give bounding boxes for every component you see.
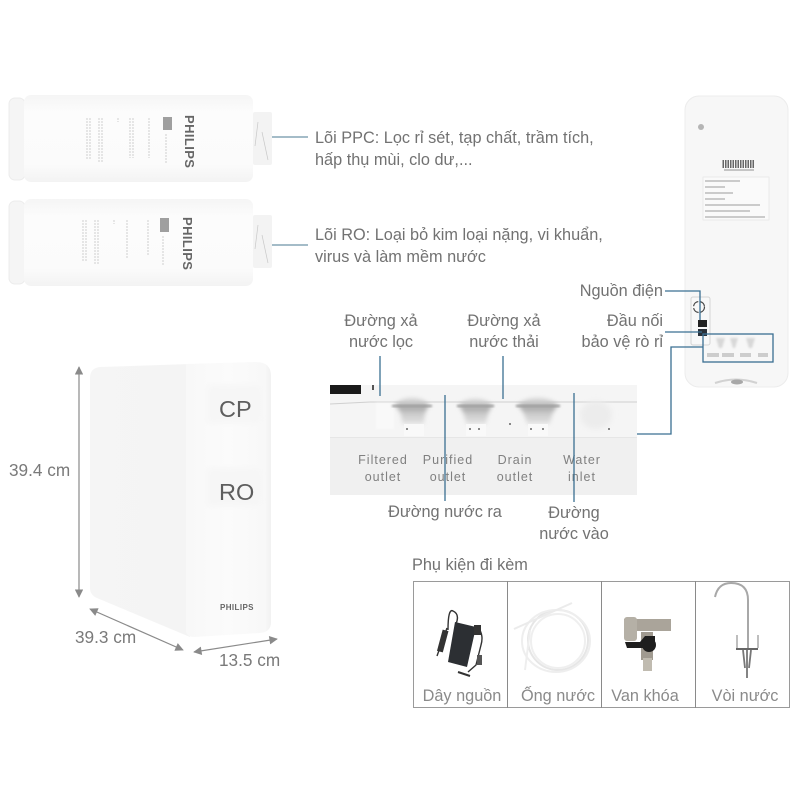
text: RO description: virus và làm mềm nước [315, 248, 486, 266]
label: leak protection connector: Đầu nối [607, 312, 663, 330]
connector callout lines [637, 291, 773, 434]
icon: water tube [514, 603, 590, 672]
accessories table: Van khóa [611, 687, 680, 705]
label: water out: Đường nước ra [388, 503, 503, 521]
dimension arrow: depth [90, 609, 183, 650]
filter cartridge: PPC: PHILIPS [182, 115, 197, 168]
purifier front 3D view: RO [219, 479, 254, 505]
purifier front 3D view: CP [219, 396, 252, 422]
outlet close-up photo: outlet [430, 470, 466, 484]
filter cartridge: RO: PHILIPS [180, 217, 195, 270]
label: depth: 39.3 cm [75, 627, 136, 647]
label: water in: nước vào [539, 525, 609, 543]
filter cartridge: RO [9, 199, 272, 286]
outlet close-up photo: Filtered [358, 453, 408, 467]
purifier front 3D view: PHILIPS [220, 603, 254, 612]
purifier front 3D view [90, 362, 271, 637]
outlet close-up photo: Drain [498, 453, 532, 467]
outlet close-up photo [330, 385, 637, 495]
text: PPC description: Lõi PPC: Lọc rỉ sét, tạp chất, trầm tích, [315, 129, 594, 147]
outlet close-up photo: outlet [497, 470, 533, 484]
label: width: 13.5 cm [219, 650, 280, 670]
icon: power adapter [437, 611, 482, 676]
text: PPC description: hấp thụ mùi, clo dư,... [315, 151, 473, 169]
label: power source: Nguồn điện [580, 282, 663, 300]
accessories table: Dây nguồn [423, 687, 501, 705]
icon: shut-off valve [624, 617, 671, 671]
callout line: PPC [272, 136, 308, 138]
label: height: 39.4 cm [9, 460, 70, 480]
icon: faucet [715, 583, 758, 678]
dimension arrow: height [78, 367, 80, 597]
filter cartridge: PPC [9, 95, 272, 182]
accessories table: Vòi nước [712, 687, 778, 705]
label: leak protection connector: bảo vệ rò rỉ [582, 333, 663, 351]
outlet pointer lines [380, 356, 574, 502]
outlet close-up photo: inlet [568, 470, 596, 484]
dimension arrow: width [194, 639, 277, 652]
callout line: RO [272, 244, 308, 246]
outlet close-up photo: outlet [365, 470, 401, 484]
accessories table [414, 581, 790, 708]
accessories heading: Phụ kiện đi kèm [412, 556, 528, 574]
purifier back view [685, 96, 788, 387]
label: filtered water outlet: nước lọc [349, 333, 413, 351]
label: waste water outlet: nước thải [469, 333, 539, 351]
accessories table: Ống nước [521, 685, 595, 705]
outlet close-up photo: Water [563, 453, 601, 467]
label: waste water outlet: Đường xả [467, 312, 542, 330]
label: filtered water outlet: Đường xả [344, 312, 419, 330]
text: RO description: Lõi RO: Loại bỏ kim loại nặng, vi khuẩn, [315, 226, 603, 244]
outlet close-up photo: Purified [423, 453, 473, 467]
label: water in: Đường [548, 504, 600, 522]
